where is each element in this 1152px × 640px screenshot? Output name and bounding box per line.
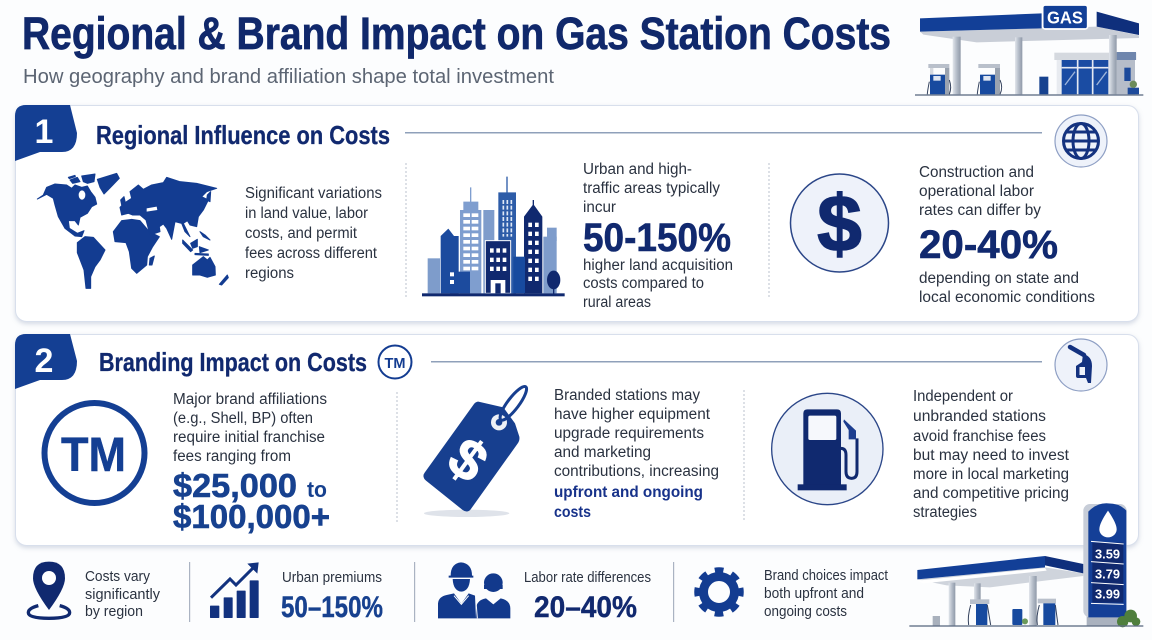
text: urban land costs: rural areas [583, 294, 651, 311]
text: labor rates [919, 164, 1095, 306]
text: urban land costs: costs compared to [583, 275, 704, 292]
icon: large TM circle: TM [61, 429, 126, 482]
text: labor rates: Construction and [919, 164, 1034, 181]
icon: city skyline [422, 177, 565, 296]
text: labor rates: depending on state and [919, 270, 1079, 287]
text: franchise fees: to [307, 477, 327, 502]
text: urban land costs: traffic areas typically [583, 180, 720, 197]
footer item: urban premiums [210, 562, 383, 624]
text: independent stations: unbranded stations [913, 408, 1046, 425]
icon: dollar circle [790, 174, 888, 272]
footer item: urban premiums: 50–150% [281, 591, 383, 624]
text: branded stations: Branded stations may [554, 387, 700, 404]
footer item: location pin [28, 562, 160, 620]
icon: price tag [423, 383, 530, 517]
text: franchise fees: $25,000 [173, 467, 297, 504]
text: independent stations: more in local marketing [913, 466, 1069, 483]
title: Regional & Brand Impact on Gas Station Costs [22, 8, 891, 59]
footer item: location pin: Costs vary [85, 568, 150, 585]
footer item: location pin: significantly [85, 586, 160, 603]
text: labor rates: rates can differ by [919, 202, 1041, 219]
text: independent stations: avoid franchise fees [913, 428, 1046, 445]
icon: gas station and price sign: 3.79 [1095, 566, 1120, 581]
badge: 1 [15, 105, 77, 161]
icon: dollar circle: $ [817, 179, 862, 268]
text: branded stations: upgrade requirements [554, 425, 704, 442]
text: urban land costs: higher land acquisition [583, 257, 733, 274]
panel: regional influence [15, 105, 1138, 322]
text: urban land costs: incur [583, 199, 616, 216]
text: labor rates: local economic conditions [919, 289, 1095, 306]
footer item: gear [698, 567, 889, 620]
text: franchise fees: fees ranging from [173, 448, 291, 465]
text: urban land costs: Urban and high- [583, 161, 692, 178]
text: franchise fees: Major brand affiliations [173, 391, 327, 408]
icon: small TM: TM [384, 355, 406, 372]
text: independent stations: and competitive pricing [913, 485, 1069, 502]
text: branded stations: costs [554, 504, 591, 521]
footer item: labor rates: Labor rate differences [524, 569, 651, 586]
text: branded stations: have higher equipment [554, 406, 711, 423]
icon: fuel pump circle [772, 393, 883, 505]
subtitle: How geography and brand affiliation shape total investment [23, 66, 554, 88]
text: franchise fees: (e.g., Shell, BP) often [173, 410, 313, 427]
footer item: gear: ongoing costs [764, 603, 847, 620]
sign: GAS: GAS [1047, 8, 1083, 28]
text: significant variations: costs, and permit [245, 225, 358, 242]
icon: gas station and price sign: 3.59 [1095, 546, 1120, 561]
badge: 1: 1 [35, 113, 53, 151]
icon: price tag: $ [436, 426, 499, 495]
text: significant variations: regions [245, 265, 294, 282]
text: labor rates: 20-40% [919, 223, 1058, 267]
footer item: gear: both upfront and [764, 585, 864, 602]
icon: gas station and price sign [909, 503, 1143, 627]
text: significant variations: in land value, labor [245, 205, 368, 222]
footer item: gear: Brand choices impact [764, 567, 889, 584]
text: franchise fees: $100,000+ [173, 498, 330, 535]
text: significant variations: Significant variations [245, 185, 382, 202]
icon: large TM circle [44, 403, 144, 503]
icon: fuel nozzle [1055, 339, 1107, 391]
footer item: labor rates: 20–40% [534, 591, 637, 624]
badge: 2 [15, 334, 77, 389]
text: independent stations [913, 388, 1070, 521]
text: branded stations: and marketing [554, 444, 651, 461]
icon: globe [1055, 115, 1107, 167]
text: labor rates: operational labor [919, 183, 1034, 200]
text: significant variations [245, 185, 382, 282]
text: branded stations: upfront and ongoing [554, 484, 703, 501]
panel: branding impact [15, 334, 1138, 546]
text: urban land costs: 50-150% [583, 216, 731, 260]
text: franchise fees [173, 391, 330, 535]
footer item: location pin: by region [85, 603, 143, 620]
icon: small TM [378, 346, 412, 378]
heading: regional influence: Regional Influence on Costs [96, 120, 390, 150]
icon: gas station and price sign: 3.99 [1095, 587, 1120, 602]
footer item: labor rates [438, 562, 651, 624]
text: independent stations: strategies [913, 504, 977, 521]
text: independent stations: Independent or [913, 388, 1013, 405]
footer item: urban premiums: Urban premiums [282, 569, 382, 586]
heading: branding impact: Branding Impact on Costs [99, 347, 367, 377]
text: branded stations [554, 387, 719, 521]
icon: world map [37, 173, 228, 288]
text: significant variations: fees across different [245, 245, 378, 262]
badge: 2: 2 [35, 342, 53, 380]
text: franchise fees: require initial franchise [173, 429, 325, 446]
text: independent stations: but may need to invest [913, 447, 1070, 464]
text: urban land costs [583, 161, 733, 311]
icon: gas station header illustration [915, 5, 1143, 96]
text: branded stations: contributions, increasing [554, 463, 719, 480]
